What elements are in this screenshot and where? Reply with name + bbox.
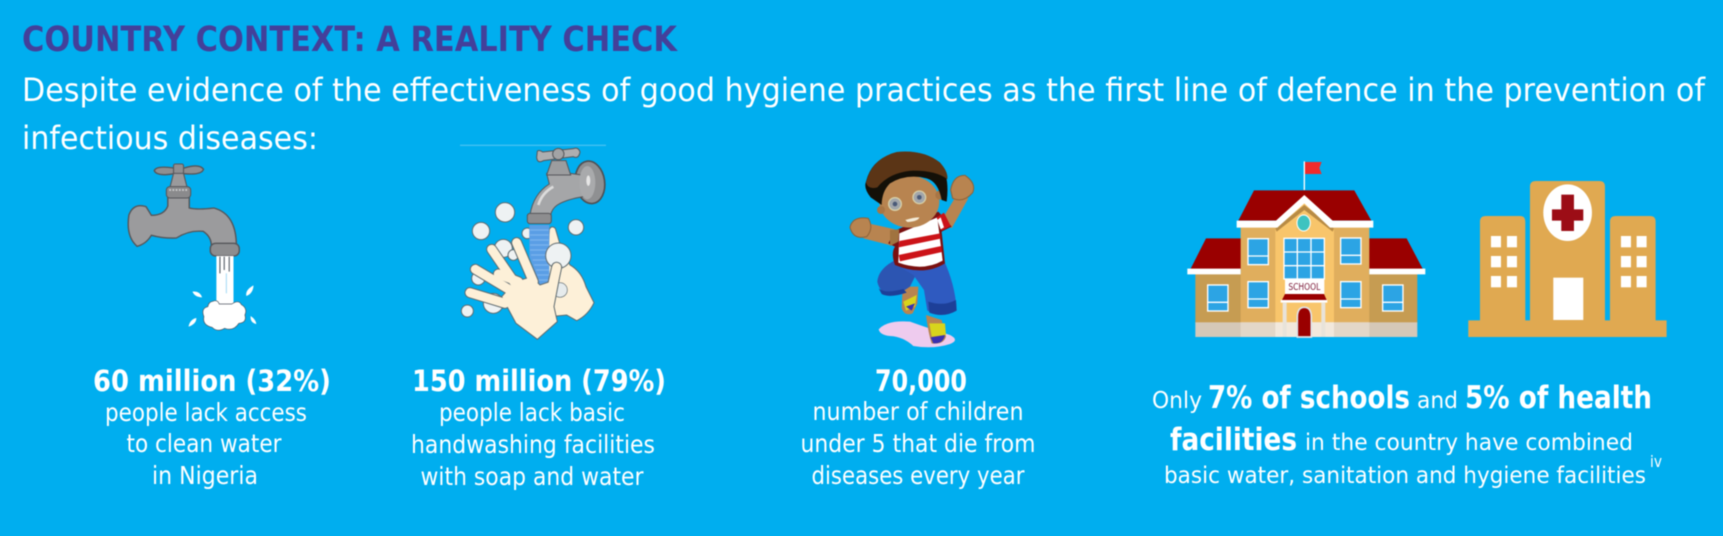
stat: schools and health facilities: 7% of schools (1208, 380, 1410, 416)
icon: jumping child (850, 152, 974, 347)
stat: clean water: to clean water (126, 429, 282, 458)
title: COUNTRY CONTEXT: A REALITY CHECK (22, 20, 679, 60)
stat: schools and health facilities: Only (1152, 388, 1202, 414)
stat: child deaths: under 5 that die from (800, 429, 1036, 458)
stat: handwashing (411, 364, 666, 491)
icon: handwashing (460, 145, 607, 339)
stat: schools and health facilities: and (1417, 388, 1458, 414)
stat: child deaths: number of children (812, 397, 1024, 426)
school sign text: SCHOOL (1288, 282, 1321, 293)
stat: child deaths: diseases every year (812, 461, 1025, 490)
icon: running water tap (128, 164, 256, 330)
stat: schools and health facilities: facilities (1170, 422, 1297, 458)
stat: handwashing: 150 million (79%) (412, 364, 666, 398)
stat: schools and health facilities: iv (1650, 452, 1662, 471)
stat: clean water: in Nigeria (152, 461, 258, 490)
icon: hospital (1468, 181, 1667, 337)
stat: child deaths: 70,000 (875, 364, 967, 398)
stat: schools and health facilities: in the country have combined (1305, 430, 1633, 456)
stat: schools and health facilities: 5% of health (1465, 380, 1652, 416)
stat: clean water: people lack access (105, 398, 307, 427)
icon: school (1187, 161, 1425, 337)
intro text block (22, 71, 1706, 157)
stat: schools and health facilities: basic water, sanitation and hygiene facilities (1164, 463, 1646, 489)
stat: child deaths (800, 364, 1036, 490)
stat: handwashing: handwashing facilities (411, 430, 655, 459)
stat: handwashing: people lack basic (439, 398, 625, 427)
stat: clean water (93, 364, 331, 490)
stat: handwashing: with soap and water (420, 462, 644, 491)
stat: schools and health facilities (1152, 380, 1662, 489)
intro text block: infectious diseases: (22, 119, 318, 157)
stat: clean water: 60 million (32%) (93, 364, 331, 398)
